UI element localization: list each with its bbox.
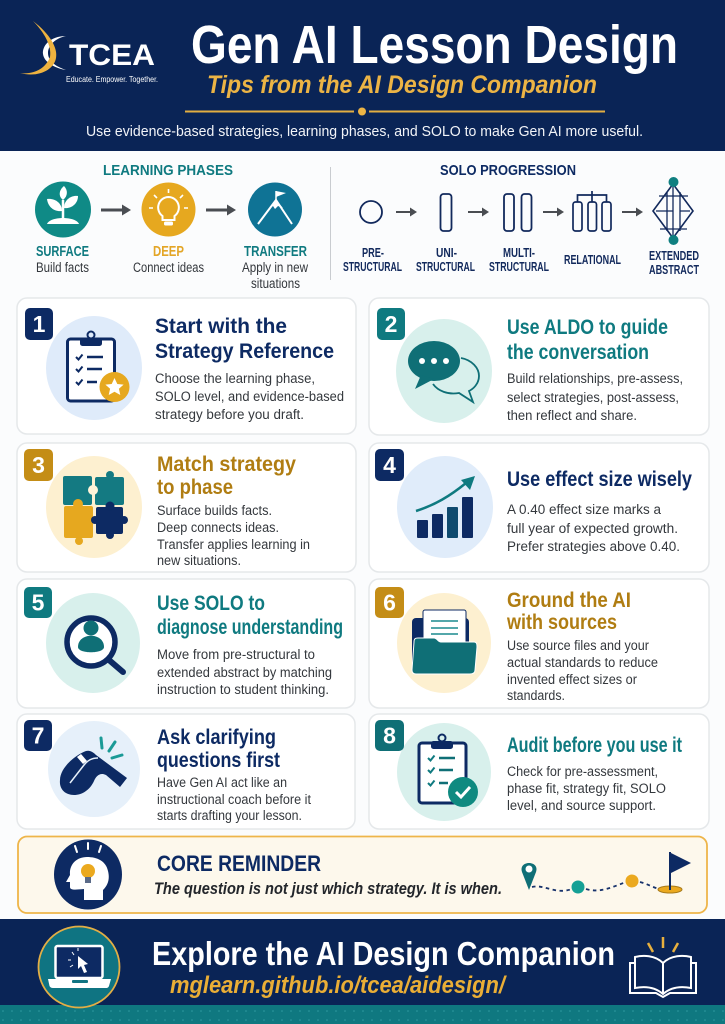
label: deep: DEEP	[153, 243, 184, 260]
body text	[157, 775, 311, 823]
body text: then reflect and share.	[507, 408, 637, 423]
body text	[157, 647, 332, 697]
label: surface: Build facts	[36, 260, 89, 275]
heading: Start with the	[155, 314, 287, 338]
body text	[507, 638, 658, 703]
body text: level, and source support.	[507, 798, 656, 813]
icon: pre-structural	[360, 201, 382, 223]
body text	[507, 371, 683, 423]
label: pre-structural: STRUCTURAL	[343, 260, 402, 274]
badge 6: 6	[383, 590, 396, 616]
panel: tip 7	[17, 714, 355, 829]
badge 8: 8	[383, 722, 396, 748]
heading: Use effect size wisely	[507, 467, 692, 491]
body text: actual standards to reduce	[507, 655, 658, 670]
heading: with sources	[506, 610, 617, 634]
logo: TCEA	[20, 21, 158, 84]
badge 3: 3	[32, 452, 45, 478]
arrow	[622, 208, 643, 216]
body text	[155, 371, 344, 422]
icon: speech bubbles	[396, 319, 492, 423]
icon: whistle	[48, 721, 140, 817]
badge 4: 4	[383, 452, 396, 478]
panel: tip 6	[369, 579, 709, 708]
badge 1	[25, 308, 53, 340]
panel: tip 4	[369, 443, 709, 572]
panel: tip 5	[17, 579, 355, 708]
tagline: Use evidence-based strategies, learning phases, and SOLO to make Gen AI more useful.	[86, 123, 643, 140]
heading	[157, 725, 280, 772]
heading: Ask clarifying	[157, 725, 276, 749]
body text: Move from pre-structural to	[157, 647, 315, 662]
heading: Match strategy	[157, 452, 296, 476]
label: multi-structural: STRUCTURAL	[489, 260, 549, 274]
heading: learning phases: LEARNING PHASES	[103, 162, 233, 179]
heading	[157, 452, 296, 499]
body text: standards.	[507, 688, 565, 703]
icon: relational	[573, 191, 611, 231]
body text: starts drafting your lesson.	[157, 808, 302, 823]
icon: uni-structural	[440, 194, 452, 231]
subtitle: Tips from the AI Design Companion	[207, 71, 597, 99]
logo: TCEA: Educate. Empower. Together.	[66, 75, 158, 84]
badge 2	[377, 308, 405, 340]
icon: open book	[630, 937, 696, 997]
body text: Use source files and your	[507, 638, 649, 653]
panel: learning phases	[35, 162, 308, 291]
icon: clipboard with check	[397, 723, 491, 821]
badge 7: 7	[32, 722, 44, 748]
body text: new situations.	[157, 553, 241, 568]
heading: Use ALDO to guide	[507, 315, 668, 339]
body text: strategy before you draft.	[155, 407, 304, 422]
label: pre-structural	[343, 246, 402, 274]
body text: invented effect sizes or	[507, 672, 637, 687]
body text: full year of expected growth.	[507, 521, 678, 536]
icon: magnifier with person	[46, 593, 140, 693]
body text: extended abstract by matching	[157, 665, 332, 680]
heading: questions first	[157, 748, 280, 772]
label: deep: Connect ideas	[133, 260, 204, 275]
label: multi-structural: MULTI-	[503, 246, 535, 260]
label: extended abstract: EXTENDED	[649, 249, 699, 263]
label: extended abstract	[649, 249, 699, 277]
icon: multi-structural	[504, 194, 532, 231]
badge 1: 1	[33, 311, 46, 337]
body text	[157, 503, 310, 568]
body text: phase fit, strategy fit, SOLO	[507, 781, 666, 796]
heading	[157, 591, 343, 639]
badge 6	[375, 587, 404, 618]
body text: Transfer applies learning in	[157, 537, 310, 552]
arrow	[206, 204, 236, 216]
label: extended abstract: ABSTRACT	[649, 263, 699, 277]
logo: TCEA: TCEA	[69, 39, 155, 72]
heading	[155, 314, 334, 363]
heading: Use SOLO to	[157, 591, 265, 615]
panel: tip 3	[17, 443, 356, 572]
footer heading: Explore the AI Design Companion	[152, 935, 615, 972]
icon: path from pin to flag	[522, 852, 691, 894]
heading	[507, 315, 668, 364]
badge 7	[24, 720, 52, 751]
panel: tip 1	[17, 298, 356, 434]
arrow	[543, 208, 564, 216]
label: relational: RELATIONAL	[564, 253, 621, 267]
badge 4	[375, 449, 404, 481]
label: uni-structural: STRUCTURAL	[416, 260, 475, 274]
heading: the conversation	[507, 340, 649, 364]
body text	[507, 502, 680, 554]
body text: SOLO level, and evidence-based	[155, 389, 344, 404]
label: transfer: situations	[251, 276, 300, 291]
body text: Deep connects ideas.	[157, 520, 279, 535]
icon: transfer mountain flag	[248, 182, 302, 236]
footer link: mglearn.github.io/tcea/aidesign/	[170, 972, 507, 999]
label: uni-structural: UNI-	[436, 246, 457, 260]
label: uni-structural	[416, 246, 475, 274]
badge 5: 5	[32, 590, 45, 616]
badge 5	[24, 587, 52, 618]
icon: head with bulb	[54, 840, 122, 910]
label: surface	[36, 243, 89, 275]
icon: growth chart	[397, 456, 493, 558]
arrow	[101, 204, 131, 216]
label: surface: SURFACE	[36, 243, 89, 260]
icon: clipboard with star	[46, 316, 142, 420]
heading: Ground the AI	[507, 588, 631, 612]
heading	[506, 588, 631, 634]
arrow	[396, 208, 417, 216]
header banner	[0, 0, 725, 151]
icon: surface sprout	[35, 182, 91, 238]
panel: SOLO progression	[343, 162, 699, 277]
label: pre-structural: PRE-	[362, 246, 384, 260]
body text: Surface builds facts.	[157, 503, 272, 518]
badge 2: 2	[385, 311, 397, 337]
icon: laptop with cursor	[38, 926, 120, 1008]
label: transfer	[242, 243, 308, 291]
label: transfer: Apply in new	[242, 260, 308, 275]
icon: puzzle pieces	[46, 456, 142, 558]
panel: tip 8	[369, 714, 709, 829]
icon: deep light bulb	[142, 182, 196, 236]
heading: diagnose understanding	[157, 615, 343, 639]
badge 8	[375, 720, 404, 751]
label: deep	[133, 243, 204, 275]
reminder sentence: The question is not just which strategy. It is when.	[154, 879, 502, 898]
body text: Prefer strategies above 0.40.	[507, 539, 680, 554]
label: transfer: TRANSFER	[244, 243, 307, 260]
label: multi-structural	[489, 246, 549, 274]
heading: to phase	[157, 475, 233, 499]
heading: Strategy Reference	[155, 339, 334, 363]
icon: folder with document	[397, 593, 491, 693]
callout: core reminder	[18, 836, 707, 913]
body text: Choose the learning phase,	[155, 371, 315, 386]
body text: instructional coach before it	[157, 792, 311, 807]
arrow	[468, 208, 489, 216]
body text: select strategies, post-assess,	[507, 390, 679, 405]
divider with dot	[185, 108, 605, 116]
icon: extended abstract	[653, 177, 693, 245]
heading: SOLO progression: SOLO PROGRESSION	[440, 162, 576, 179]
body text: Check for pre-assessment,	[507, 764, 658, 779]
body text: instruction to student thinking.	[157, 682, 329, 697]
badge 3	[24, 449, 53, 481]
body text: Have Gen AI act like an	[157, 775, 287, 790]
body text: Build relationships, pre-assess,	[507, 371, 683, 386]
panel: tip 2	[369, 298, 709, 435]
body text: A 0.40 effect size marks a	[507, 502, 661, 517]
heading: core reminder: CORE REMINDER	[157, 851, 321, 876]
body text	[507, 764, 666, 813]
footer banner	[0, 919, 725, 1024]
